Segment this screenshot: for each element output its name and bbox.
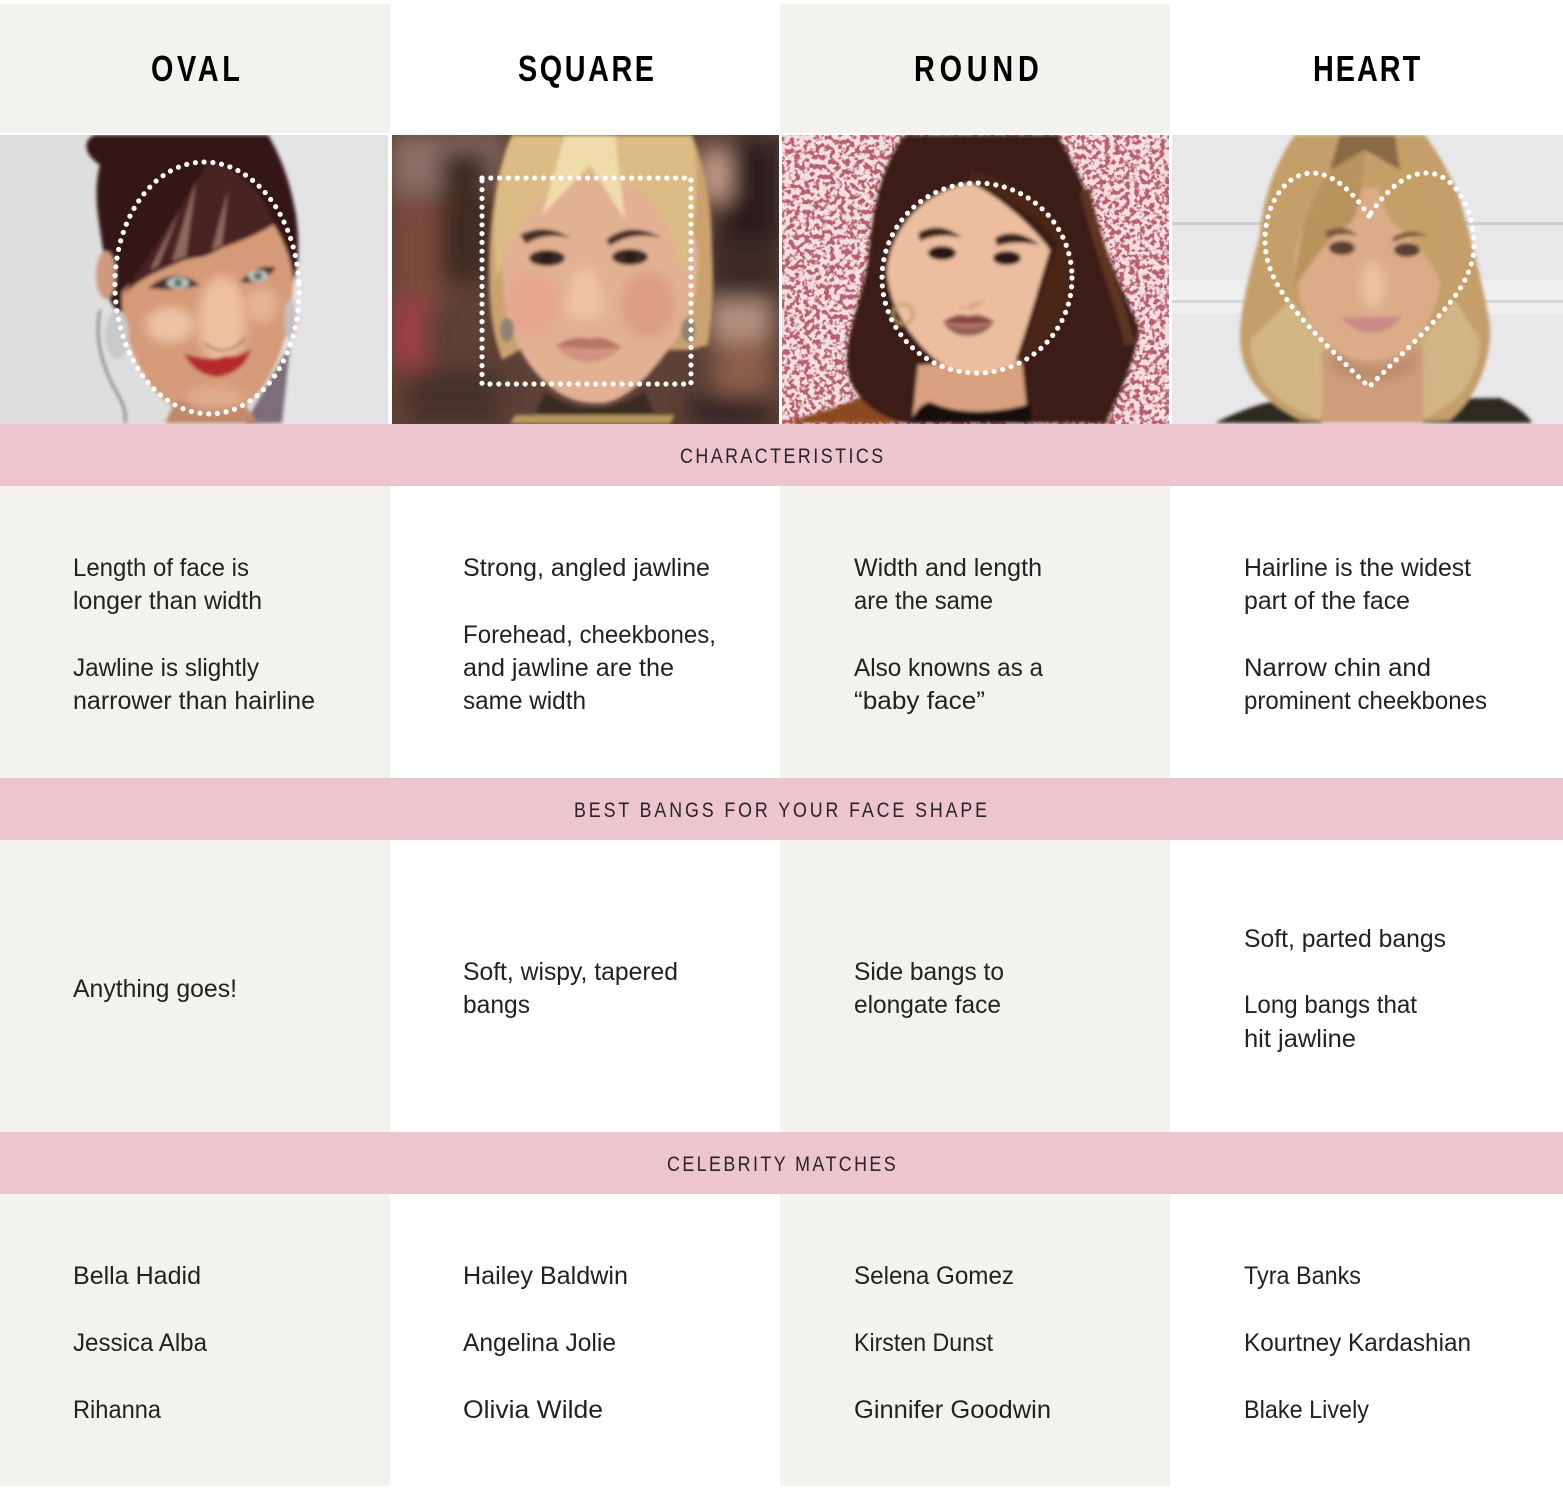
celebrities: heart: Tyra Banks <box>1244 1262 1361 1290</box>
header: heart: HEART <box>1313 48 1420 89</box>
dotted outline: oval <box>110 158 304 418</box>
celebrities: oval: Rihanna <box>73 1396 161 1424</box>
celebrities: square: Angelina Jolie <box>463 1329 616 1357</box>
celebrities: round: Selena Gomez <box>854 1262 1014 1290</box>
characteristics: oval: Jawline is slightly <box>73 654 259 682</box>
celebrities: oval <box>73 1262 207 1424</box>
celebrities: square <box>463 1262 628 1424</box>
celebrities: square: Olivia Wilde <box>463 1396 603 1424</box>
celebrities: square: Hailey Baldwin <box>463 1262 628 1290</box>
characteristics: heart: Narrow chin and <box>1244 654 1431 682</box>
bangs: square <box>463 958 678 1019</box>
characteristics: oval: narrower than hairline <box>73 687 315 715</box>
section band: characteristics <box>0 424 1563 486</box>
bangs: heart: Soft, parted bangs <box>1244 925 1446 953</box>
bangs: square: bangs <box>463 991 530 1019</box>
header: square: SQUARE <box>518 48 654 89</box>
characteristics: round: Width and length <box>854 554 1042 582</box>
celebrities: heart: Blake Lively <box>1244 1396 1369 1424</box>
section band: best bangs: BEST BANGS FOR YOUR FACE SHAPE <box>574 799 987 822</box>
dotted outline: round <box>882 183 1072 373</box>
celebrities: oval: Jessica Alba <box>73 1329 207 1357</box>
celebrities: round <box>854 1262 1051 1424</box>
header: round: ROUND <box>914 48 1039 89</box>
column backgrounds <box>0 4 1170 1486</box>
dotted outline: square <box>482 178 691 384</box>
characteristics: square <box>463 554 716 715</box>
characteristics: square: and jawline are the <box>463 654 674 682</box>
bangs: round <box>854 958 1004 1019</box>
characteristics: heart <box>1244 554 1487 715</box>
bangs: heart: hit jawline <box>1244 1025 1356 1053</box>
characteristics: oval <box>73 554 315 715</box>
section band: best bangs <box>0 778 1563 840</box>
photo strip backing <box>0 133 1563 424</box>
characteristics: square: Forehead, cheekbones, <box>463 621 716 649</box>
bangs: oval: Anything goes! <box>73 975 237 1003</box>
bangs: round: elongate face <box>854 991 1001 1019</box>
characteristics: round: “baby face” <box>854 687 985 715</box>
celebrities: round: Ginnifer Goodwin <box>854 1396 1051 1424</box>
characteristics: oval: Length of face is <box>73 554 249 582</box>
characteristics: heart: prominent cheekbones <box>1244 687 1487 715</box>
section band: celebrity matches <box>0 1132 1563 1194</box>
section band: characteristics: CHARACTERISTICS <box>680 445 883 468</box>
celebrities: heart <box>1244 1262 1471 1424</box>
celebrities: oval: Bella Hadid <box>73 1262 201 1290</box>
bangs: square: Soft, wispy, tapered <box>463 958 678 986</box>
photo: round face <box>782 135 1169 424</box>
photo: oval face <box>0 135 388 424</box>
characteristics: oval: longer than width <box>73 587 262 615</box>
bangs: round: Side bangs to <box>854 958 1004 986</box>
photo: square face <box>392 135 780 424</box>
photo: heart face <box>1172 135 1563 424</box>
characteristics: round <box>854 554 1043 715</box>
celebrities: heart: Kourtney Kardashian <box>1244 1329 1471 1357</box>
characteristics: heart: Hairline is the widest <box>1244 554 1471 582</box>
characteristics: round: are the same <box>854 587 993 615</box>
bangs: heart: Long bangs that <box>1244 991 1417 1019</box>
bangs: heart <box>1244 925 1446 1053</box>
characteristics: square: same width <box>463 687 586 715</box>
characteristics: square: Strong, angled jawline <box>463 554 710 582</box>
section band: celebrity matches: CELEBRITY MATCHES <box>667 1153 896 1176</box>
dotted outline: heart <box>1265 173 1474 387</box>
characteristics: heart: part of the face <box>1244 587 1410 615</box>
characteristics: round: Also knowns as a <box>854 654 1043 682</box>
celebrities: round: Kirsten Dunst <box>854 1329 993 1357</box>
header: oval: OVAL <box>151 48 240 89</box>
